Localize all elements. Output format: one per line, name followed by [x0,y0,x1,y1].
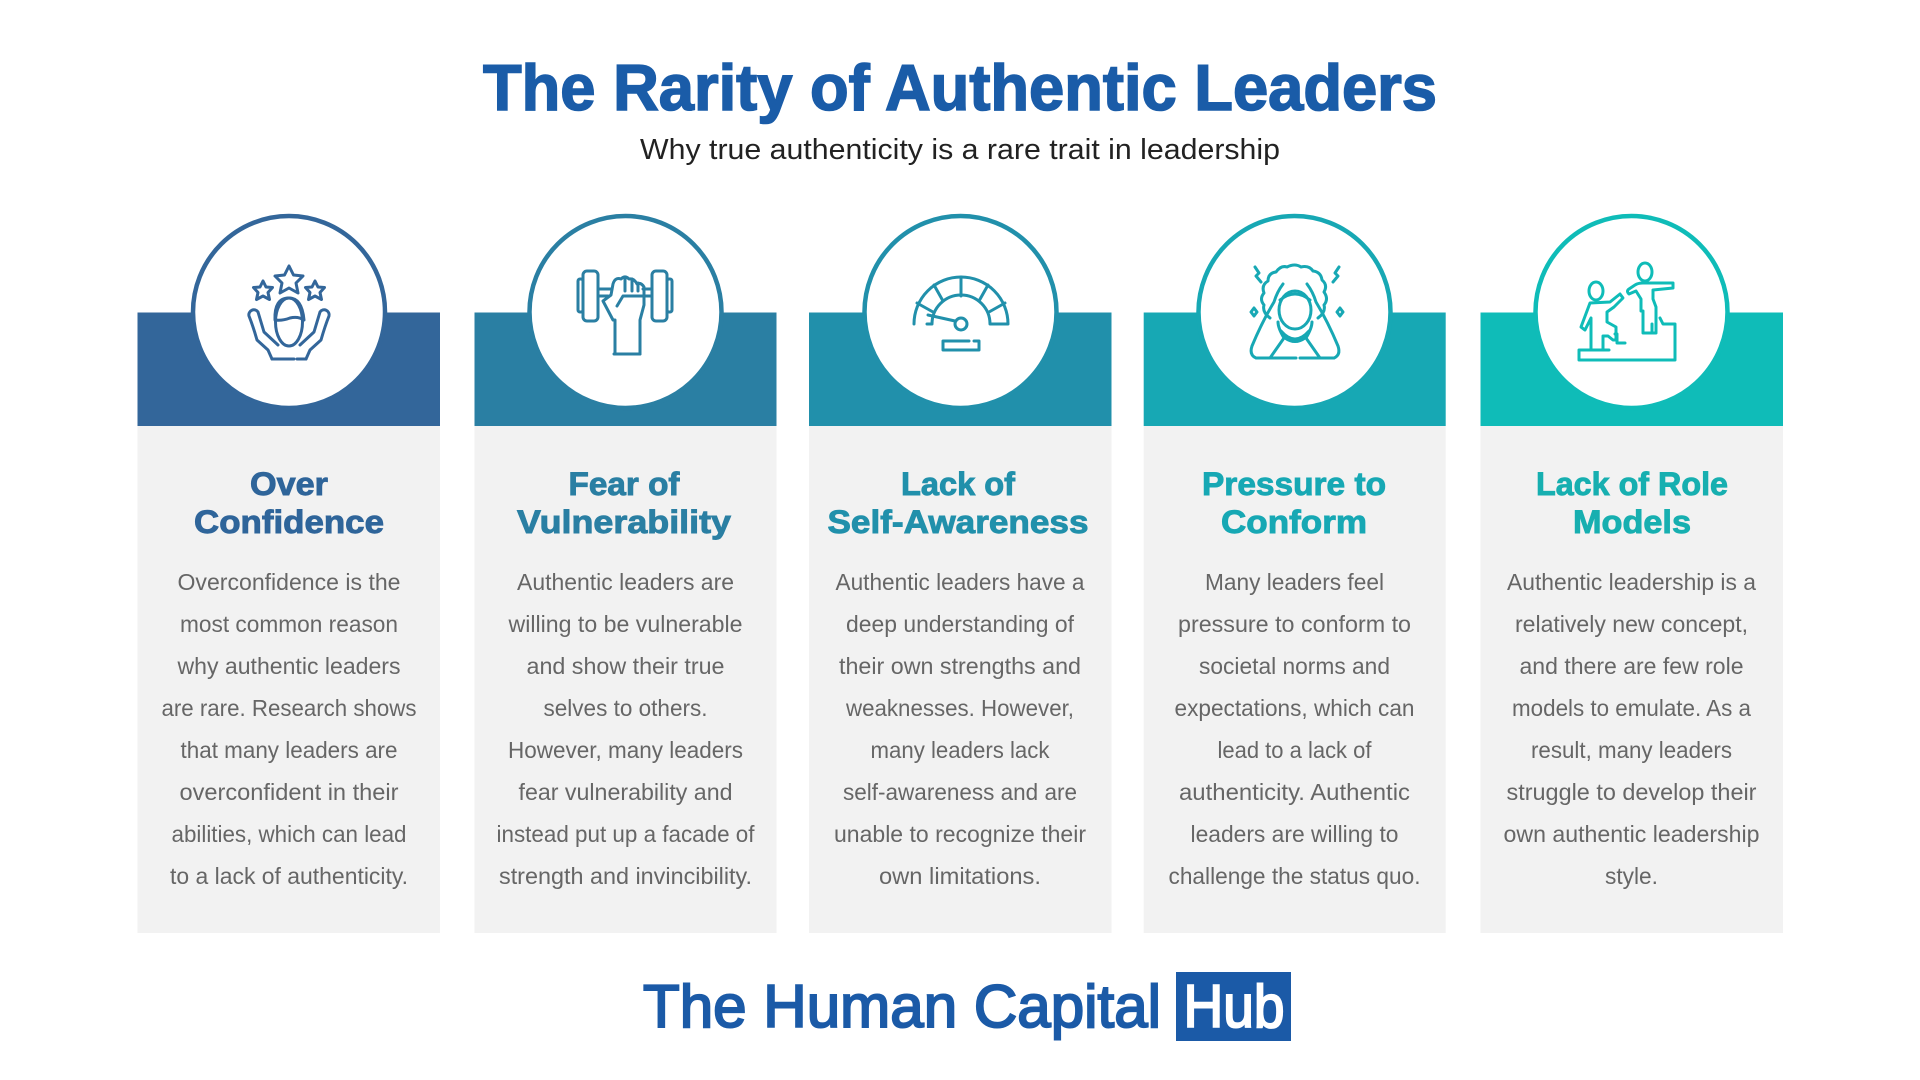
body text: instead put up a facade of [496,821,755,847]
heading: Vulnerability [517,504,731,540]
body text: expectations, which can [1174,695,1414,721]
heading: Fear of [568,466,680,502]
body text: why authentic leaders [176,653,400,679]
heading: Pressure to [1202,466,1386,502]
body text: However, many leaders [508,737,743,763]
body text: deep understanding of [846,611,1075,637]
body text: most common reason [180,611,398,637]
body text: societal norms and [1199,653,1390,679]
heading [194,466,384,540]
body text: strength and invincibility. [499,863,752,889]
body text: own authentic leadership [1504,821,1760,847]
body text: fear vulnerability and [518,779,732,805]
panel: Pressure to Conform [1144,216,1446,933]
subtitle: Why true authenticity is a rare trait in leadership [640,134,1280,166]
body text: and there are few role [1520,653,1744,679]
coloured header band [809,312,1112,426]
title: The Rarity of Authentic Leaders [483,51,1437,124]
heading: Lack of Role [1536,466,1728,502]
body text [1168,569,1420,889]
heading [828,466,1088,540]
body text: style. [1605,863,1658,889]
icon: person with stars [249,266,329,359]
panel: Over Confidence [138,216,440,933]
body text: self-awareness and are [843,779,1077,805]
body text: struggle to develop their [1506,779,1757,805]
body text: and show their true [526,653,724,679]
panel: Lack of Self-Awareness [809,216,1112,933]
body text: result, many leaders [1531,737,1732,763]
heading: Lack of [901,466,1015,502]
icon circle [1198,216,1390,408]
coloured header band [474,312,776,426]
icon: mentor helping climber on stairs [1579,263,1675,360]
body text: Overconfidence is the [178,569,400,595]
body text: are rare. Research shows [162,695,416,721]
icon: stressed person holding head [1251,265,1343,358]
body text: Authentic leaders have a [836,569,1085,595]
panel body background [138,426,440,933]
body text: many leaders lack [870,737,1050,763]
heading: Models [1573,504,1691,540]
heading [1202,466,1386,540]
icon circle [530,216,722,408]
body text: selves to others. [544,695,708,721]
body text [1504,569,1760,889]
body text [496,569,755,889]
panel body background [1480,426,1783,933]
body text: leaders are willing to [1190,821,1398,847]
body text: models to emulate. As a [1512,695,1751,721]
panel body background [474,426,776,933]
body text: willing to be vulnerable [507,611,742,637]
body text: weaknesses. However, [845,695,1074,721]
body text: challenge the status quo. [1168,863,1420,889]
heading: Over [250,466,328,502]
panel: Lack of Role Models [1480,216,1783,933]
body text: unable to recognize their [834,821,1086,847]
body text: own limitations. [879,863,1041,889]
body text: pressure to conform to [1178,611,1411,637]
body text: abilities, which can lead [172,821,406,847]
body text: Many leaders feel [1205,569,1384,595]
body text: relatively new concept, [1515,611,1748,637]
heading [1536,466,1728,540]
panel: Fear of Vulnerability [474,216,776,933]
panel body background [1144,426,1446,933]
logo: The Human Capital Hub: Hub [1184,973,1284,1040]
icon circle [864,216,1056,408]
body text [162,569,416,889]
body text: that many leaders are [180,737,398,763]
body text: Authentic leadership is a [1507,569,1756,595]
body text: to a lack of authenticity. [170,863,408,889]
body text [834,569,1086,889]
heading: Confidence [194,504,384,540]
body text: authenticity. Authentic [1179,779,1410,805]
coloured header band [138,312,440,426]
logo: The Human Capital Hub: The Human Capital [643,973,1161,1040]
icon: hand lifting dumbbell [578,271,672,354]
icon: gauge [914,277,1008,350]
body text: their own strengths and [839,653,1081,679]
heading: Self-Awareness [828,504,1088,540]
body text: Authentic leaders are [517,569,734,595]
body text: lead to a lack of [1218,737,1372,763]
heading: Conform [1221,504,1367,540]
icon circle [193,216,385,408]
coloured header band [1480,312,1783,426]
coloured header band [1144,312,1446,426]
panel body background [809,426,1112,933]
heading [517,466,731,540]
icon circle [1536,216,1728,408]
body text: overconfident in their [180,779,399,805]
